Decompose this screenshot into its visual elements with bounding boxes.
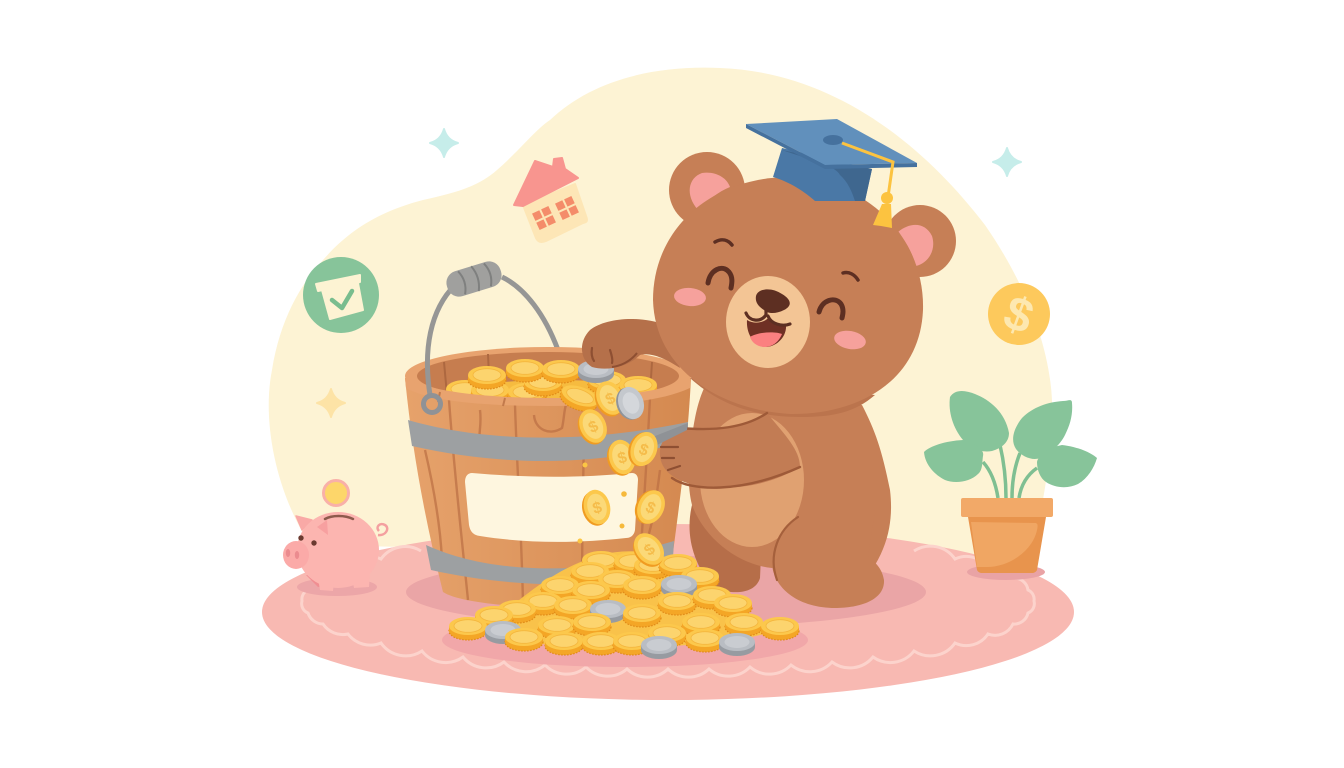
piggy eyes	[298, 535, 304, 541]
leaf right	[1037, 445, 1097, 487]
background blob	[269, 68, 1052, 560]
piggy ear	[296, 516, 312, 530]
lower metal band	[426, 545, 580, 584]
bucket body	[405, 378, 691, 607]
top metal band	[408, 420, 688, 461]
cap board	[746, 119, 917, 165]
wooden bucket	[405, 258, 691, 607]
bear left leg	[690, 505, 761, 592]
muzzle	[726, 276, 810, 368]
bear right leg	[772, 510, 884, 608]
bucket left handle arm	[427, 285, 455, 395]
piggy body	[297, 512, 379, 588]
bear torso	[689, 380, 891, 568]
right eye	[819, 300, 843, 318]
inner plank lines	[444, 354, 652, 398]
sparkle: yellow	[317, 389, 345, 417]
icon: dollar coin	[988, 283, 1050, 345]
falling coin	[324, 480, 348, 506]
tassel	[842, 143, 893, 228]
bear lower arm and paw holding coin	[650, 413, 800, 488]
rim notches	[438, 392, 630, 406]
cap button	[823, 135, 843, 145]
potted plant	[924, 391, 1097, 580]
head shape	[653, 177, 923, 414]
head underside shadow	[690, 378, 875, 417]
shadow under coin pile	[442, 613, 808, 667]
pot body	[968, 517, 1046, 573]
silver falling coin	[612, 383, 648, 423]
bear belly	[700, 413, 804, 547]
right inner ear	[898, 225, 933, 266]
right cheek	[833, 328, 867, 352]
bucket right handle arm	[502, 277, 558, 350]
leaf top left	[950, 391, 1009, 451]
pot highlight	[971, 522, 1038, 567]
right brow	[843, 272, 858, 280]
falling coins	[557, 377, 670, 544]
bucket blank label	[465, 473, 638, 542]
badge bin body	[322, 283, 363, 319]
nose	[756, 289, 790, 313]
piggy inner ear	[317, 520, 328, 535]
check mark	[332, 291, 352, 308]
pot rim	[961, 498, 1053, 517]
mouth	[746, 307, 790, 347]
piggy front legs	[318, 572, 370, 591]
piggy tail	[378, 524, 387, 535]
bear head	[653, 152, 956, 417]
coins inside bucket	[446, 372, 657, 398]
coin pile	[449, 527, 799, 659]
wood planks	[425, 398, 660, 606]
cap base	[773, 148, 872, 201]
graduation cap	[746, 119, 917, 228]
piggy snout	[283, 541, 309, 569]
silver coin in paw	[578, 360, 614, 383]
left eye	[708, 268, 732, 288]
shadow under bucket and bear	[406, 556, 926, 628]
left inner ear	[690, 173, 730, 210]
piggy back legs	[306, 575, 353, 587]
handle grip	[443, 258, 505, 300]
plant stems	[983, 445, 1037, 498]
leg outline	[774, 517, 798, 580]
piggy shadow	[297, 578, 377, 596]
sparkle: teal right	[993, 148, 1021, 176]
left cheek	[673, 287, 707, 307]
pink rug	[262, 524, 1074, 700]
pot shadow	[967, 564, 1045, 580]
bucket front rim	[405, 378, 691, 406]
house windows	[532, 196, 579, 230]
house roof	[514, 158, 578, 206]
icon: dollar coin: $	[997, 286, 1040, 345]
bucket inside	[417, 352, 679, 400]
left brow	[715, 240, 732, 245]
left ear	[669, 152, 745, 228]
leaf top right	[1013, 400, 1072, 459]
right ear	[884, 205, 956, 277]
icon: house	[514, 158, 587, 242]
piggy bank	[283, 480, 387, 596]
bear body	[689, 380, 891, 608]
badge bin lid	[316, 275, 360, 291]
icon: checklist badge	[303, 257, 379, 333]
sparkle: teal left	[430, 129, 458, 157]
piggy slot	[325, 516, 353, 519]
house walls	[523, 184, 587, 242]
bear upper arm and paw	[582, 319, 680, 369]
lace border	[302, 546, 1034, 677]
leaf left	[924, 440, 983, 482]
handle ring	[424, 396, 440, 412]
bucket rim	[405, 347, 691, 405]
